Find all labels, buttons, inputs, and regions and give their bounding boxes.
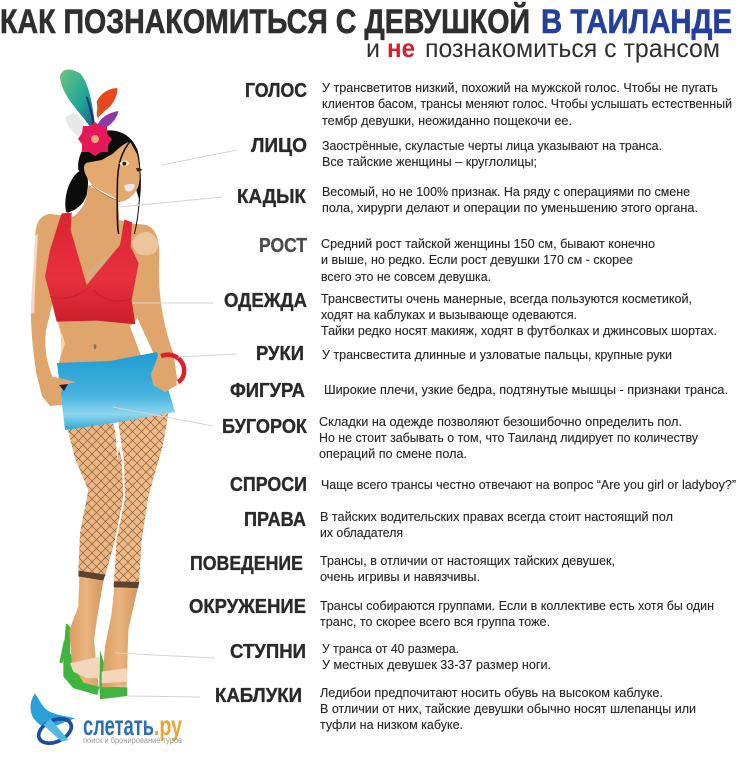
- label: БУГОРОК: БУГОРОК: [222, 416, 308, 438]
- text: рост: [321, 236, 655, 284]
- text: голос: [322, 80, 732, 128]
- text: голос: У трансветитов низкий, похожий на мужской голос. Чтобы не пугать: [322, 80, 718, 95]
- label: ФИГУРА: ФИГУРА: [230, 380, 305, 402]
- subtitle: познакомиться с трансом: [425, 33, 720, 63]
- hands and bracelet: [36, 355, 184, 406]
- text: каблуки: Ледибои предпочитают носить обувь на высоком каблуке.: [320, 685, 663, 700]
- text: окружение: транс, то скорее всего вся группа тоже.: [320, 614, 550, 629]
- text: одежда: [321, 291, 717, 338]
- label: КАБЛУКИ: КАБЛУКИ: [215, 685, 302, 707]
- text: одежда: Тайки редко носят макияж, ходят в футболках и джинсовых шортах.: [321, 323, 717, 338]
- text: поведение: очень игривы и навязчивы.: [320, 569, 480, 584]
- label: РОСТ: РОСТ: [259, 235, 307, 257]
- text: лицо: Заострённые, скуластые черты лица указывают на транса.: [322, 138, 662, 153]
- red top: [45, 213, 139, 324]
- text: рост: Средний рост тайской женщины 150 см, бывают конечно: [321, 236, 655, 251]
- text: каблуки: туфли на низком кабуке.: [320, 717, 463, 732]
- text: фигура: Широкие плечи, узкие бедра, подтянутые мышцы - признаки транса.: [324, 382, 728, 397]
- label: ОДЕЖДА: ОДЕЖДА: [224, 290, 307, 312]
- blue skirt: [57, 352, 175, 430]
- text: кадык: пола, хирурги делают и операции по уменьшению этого органа.: [322, 200, 698, 215]
- text: бугорок: операций по смене пола.: [319, 446, 467, 461]
- text: бугорок: Но не стоит забывать о том, что Таиланд лидирует по количеству: [319, 430, 698, 445]
- text: голос: тембр девушки, неожиданно пощекочи ее.: [322, 113, 572, 128]
- subtitle: и: [366, 33, 380, 63]
- legs with fishnet stockings: [68, 413, 168, 588]
- text: кадык: Весомый, но не 100% признак. На ряду с операциями по смене: [322, 184, 690, 199]
- label: РУКИ: РУКИ: [256, 343, 304, 365]
- feathers headdress: [60, 70, 118, 138]
- text: одежда: Трансвеститы очень манерные, всегда пользуются косметикой,: [321, 291, 692, 306]
- text: права: В тайских водительских правах всегда стоит настоящий пол: [320, 509, 673, 524]
- left arm: [31, 214, 62, 380]
- label: ПОВЕДЕНИЕ: ПОВЕДЕНИЕ: [190, 553, 303, 575]
- label: СТУПНИ: СТУПНИ: [230, 641, 306, 663]
- text: одежда: ходят на каблуках и вызывающе одеваются.: [321, 307, 577, 322]
- face: [84, 141, 143, 234]
- text: лицо: Все тайские женщины – круглолицы;: [322, 154, 537, 169]
- title: КАК ПОЗНАКОМИТЬСЯ С ДЕВУШКОЙ: [0, 2, 530, 41]
- text: бугорок: [319, 414, 698, 461]
- logo: слетать.ру: поиск и бронирование туров: [83, 736, 182, 745]
- label: КАДЫК: КАДЫК: [237, 186, 307, 208]
- label: ЛИЦО: ЛИЦО: [251, 135, 307, 157]
- text: бугорок: Складки на одежде позволяют безошибочно определить пол.: [319, 414, 682, 429]
- logo: слетать.ру: .ру: [154, 710, 182, 741]
- right arm: [130, 257, 177, 390]
- text: руки: У трансвестита длинные и узловатые пальцы, крупные руки: [322, 347, 672, 362]
- label: ОКРУЖЕНИЕ: ОКРУЖЕНИЕ: [189, 596, 306, 618]
- text: права: [320, 509, 673, 540]
- text: рост: и выше, но редко. Если рост девушки 170 см - скорее: [321, 252, 633, 267]
- label: ГОЛОС: ГОЛОС: [245, 80, 307, 102]
- text: поведение: Трансы, в отличии от настоящих тайских девушек,: [320, 553, 615, 568]
- text: рост: всего это не совсем девушка.: [321, 269, 491, 284]
- label: СПРОСИ: СПРОСИ: [230, 474, 307, 496]
- logo: слетать.ру: слетать: [83, 710, 154, 741]
- shoes and feet: [59, 577, 138, 699]
- text: каблуки: В отличии от них, тайские девушки обычно носят шлепанцы или: [320, 701, 696, 716]
- logo: слетать.ру: [30, 693, 182, 748]
- text: ступни: У транса от 40 размера.: [322, 641, 459, 656]
- text: лицо: [322, 138, 662, 169]
- text: окружение: [320, 598, 714, 629]
- ponytail and hair: [65, 130, 140, 213]
- illustration: woman figure: [31, 70, 184, 699]
- text: каблуки: [320, 685, 696, 732]
- subtitle: не: [387, 33, 415, 63]
- label: ПРАВА: ПРАВА: [244, 509, 306, 531]
- text: ступни: У местных девушек 33-37 размер ноги.: [322, 657, 551, 672]
- text: ступни: [322, 641, 551, 672]
- text: права: их обладателя: [320, 525, 403, 540]
- flower: [78, 122, 112, 156]
- torso and neck: [31, 185, 159, 365]
- text: окружение: Трансы собираются группами. Если в коллективе есть хотя бы один: [320, 598, 714, 613]
- leader lines: [113, 150, 237, 697]
- text: кадык: [322, 184, 698, 215]
- text: поведение: [320, 553, 615, 584]
- icon: blue bird: [30, 693, 75, 748]
